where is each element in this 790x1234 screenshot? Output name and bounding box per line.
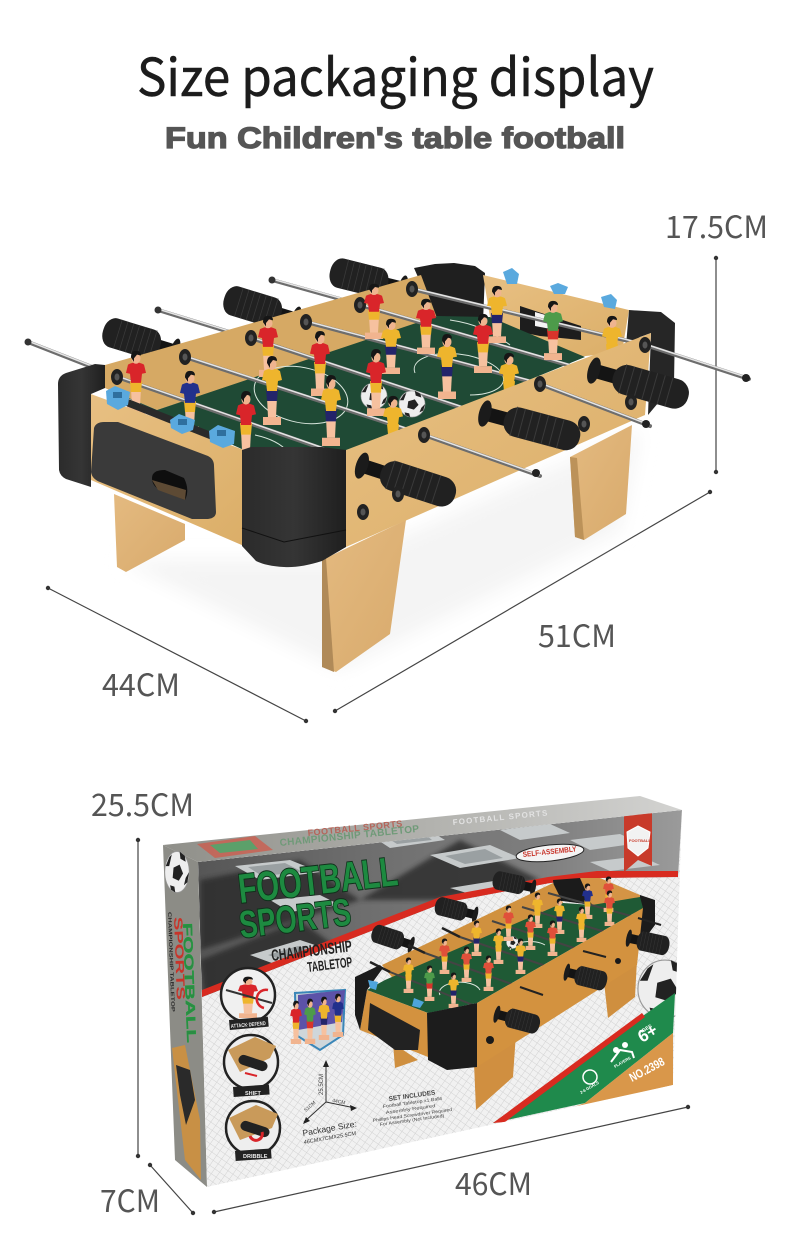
feature icon: dribble <box>226 1101 280 1161</box>
long front panel <box>346 333 651 547</box>
printed legs <box>393 960 637 1110</box>
foosball table photo <box>24 256 750 672</box>
box top face: FOOTBALL SPORTS <box>307 818 403 838</box>
back long panel inner face <box>105 275 437 410</box>
set includes text <box>372 1089 453 1127</box>
heading: championship tabletop: TABLETOP <box>306 954 353 975</box>
green playing field <box>105 316 585 455</box>
short front panel <box>88 393 244 546</box>
set includes text: Football Tabletop x1 Balls <box>382 1096 443 1109</box>
set includes text: For Assembly (Not Included) <box>379 1113 445 1127</box>
box top face: FOOTBALL SPORTS <box>452 808 548 827</box>
red banner stripe <box>202 871 678 997</box>
table shadow <box>120 430 640 670</box>
box top face: CHAMPIONSHIP TABLETOP <box>279 824 420 849</box>
dimension: table length <box>333 490 712 713</box>
feature icon: dribble: DRIBBLE <box>243 1154 268 1160</box>
age and player badges: PLAYERS <box>613 1055 632 1069</box>
dimension: box length <box>212 1105 690 1214</box>
box top face <box>163 796 682 862</box>
heading: football: FOOTBALL <box>236 848 400 912</box>
box side face: SPORTS <box>171 917 188 1000</box>
dimension: table length: 51CM <box>538 611 616 656</box>
dimension: box height: 25.5CM <box>91 780 194 825</box>
box side face <box>163 845 207 1187</box>
feature icon: shift <box>224 1035 278 1097</box>
box front face <box>190 800 692 1187</box>
age and player badges: AGES <box>638 1023 654 1036</box>
soccer ball <box>399 391 425 417</box>
printed soccer ball <box>637 960 677 1017</box>
age and player badges: 6+ <box>634 1020 661 1046</box>
printed rods <box>370 893 638 1009</box>
goal slot <box>520 306 581 340</box>
package size text: 46CMX7CMX25.5CM <box>303 1131 357 1146</box>
rods inside table <box>111 281 645 460</box>
wood corner <box>574 1033 673 1107</box>
table legs <box>114 425 632 672</box>
dimension: box depth <box>100 1163 195 1221</box>
dimension: table height <box>665 202 768 474</box>
near black corner cap <box>242 447 346 567</box>
field markings <box>254 320 510 452</box>
players shield badge <box>290 990 345 1050</box>
printed players <box>403 877 615 1008</box>
dimension: box length: 46CM <box>455 1159 532 1204</box>
dimension: box depth: 7CM <box>100 1176 160 1221</box>
grey banner <box>198 810 682 997</box>
rod exits and handles on the near side <box>352 337 750 520</box>
green corner stripe <box>493 993 675 1123</box>
dimension: table width: 44CM <box>102 660 180 705</box>
brand ribbon <box>624 813 652 872</box>
dimension: table height: 17.5CM <box>665 202 768 247</box>
brand ribbon: FOOTBALL <box>629 838 651 843</box>
printed front handles <box>486 918 671 1044</box>
left black corner cap <box>58 364 105 487</box>
package size text: Package Size: <box>302 1119 358 1138</box>
ball return box <box>91 422 216 519</box>
feature icon: attack defend <box>221 968 275 1030</box>
printed table body <box>367 878 655 1013</box>
players: far yellow and green row <box>487 286 622 375</box>
heading: championship tabletop <box>272 940 352 972</box>
set includes text: Assembly Required <box>385 1103 436 1115</box>
set includes text: Phillips Head Screwdriver Required <box>372 1107 453 1123</box>
heading: championship tabletop: CHAMPIONSHIP <box>270 938 353 965</box>
box side face: CHAMPIONSHIP TABLETOP <box>166 912 176 1013</box>
players: red row 3 <box>258 316 386 416</box>
far-right corner cap <box>626 310 675 415</box>
printed back handles <box>369 870 538 954</box>
package size axes: 51CM <box>303 1100 317 1113</box>
dimension: box height <box>91 780 194 1158</box>
package size text <box>302 1122 356 1144</box>
box side face: FOOTBALL <box>180 923 199 1043</box>
dimension: table width <box>46 586 308 723</box>
players: yellow row 4 <box>381 319 519 412</box>
goal rail with blue clips <box>106 268 617 448</box>
heading: sports: SPORTS <box>237 892 353 947</box>
feature icon: attack defend: ATTACK·DEFEND <box>231 1021 266 1030</box>
hidden soccer ball <box>361 383 387 409</box>
package size axes: 25.5CM <box>319 1074 325 1095</box>
feature icon: shift: SHIFT <box>245 1091 262 1097</box>
model number: NO.2398 <box>627 1054 667 1085</box>
printed table image <box>355 870 671 1110</box>
far black corner cap <box>414 263 485 322</box>
title: Size packaging display <box>137 36 654 111</box>
packaging box <box>163 796 692 1187</box>
self-assembly badge: SELF-ASSEMBLY <box>522 844 577 859</box>
age and player badges: 2-6 GOALS <box>579 1080 600 1095</box>
rear rods and handles <box>24 256 411 378</box>
red corner stripe <box>493 1013 645 1123</box>
subtitle: Fun Children's table football <box>165 122 625 155</box>
players: front mixed row <box>126 351 256 458</box>
players: red row 5 <box>364 284 493 373</box>
set includes text: SET INCLUDES <box>388 1089 436 1103</box>
players: yellow row 2 <box>262 356 403 455</box>
far short panel <box>483 275 629 357</box>
age and player badges <box>580 1024 656 1094</box>
package size axes: 44CM <box>332 1098 346 1106</box>
package size axes <box>303 1060 357 1124</box>
printed front panels <box>355 908 643 1070</box>
